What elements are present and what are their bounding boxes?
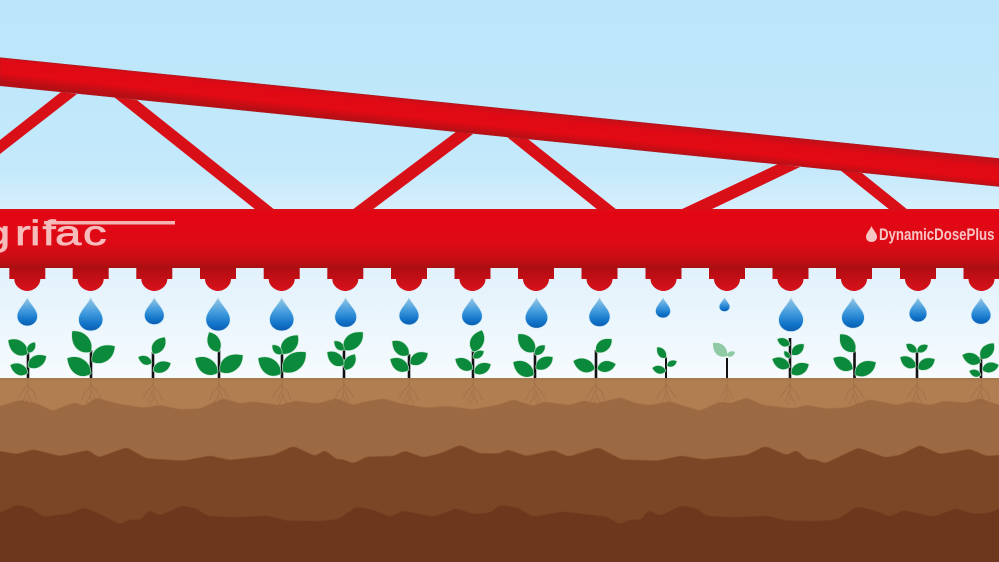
plant 7: [387, 336, 431, 378]
logo: grifac: [0, 213, 175, 253]
main boom bar: [0, 209, 999, 268]
plant roots: [18, 378, 990, 405]
plant 14: [830, 330, 880, 381]
soil layer: topsoil: [0, 378, 999, 438]
brand: DynamicDosePlus: [866, 226, 994, 244]
upper boom beam: [0, 58, 999, 186]
water drops: [17, 297, 991, 332]
plant 11: [651, 345, 678, 378]
plant 15: [897, 341, 938, 378]
soil layers: [0, 378, 999, 562]
soil surface edge: [0, 378, 999, 380]
soil layer: third: [0, 445, 999, 562]
logo line: [44, 221, 175, 224]
plant 9: [509, 329, 556, 381]
plant 10: [571, 334, 617, 378]
soil layer: second: [0, 397, 999, 562]
plant 2: [62, 326, 119, 381]
plant 1: [4, 334, 50, 378]
plant 6: [323, 326, 368, 378]
plant 4: [190, 329, 248, 380]
plant 5: [253, 330, 312, 381]
plant 3: [136, 333, 173, 378]
sky background: [0, 0, 999, 380]
plant 8: [452, 327, 493, 378]
plants row: [4, 326, 999, 381]
soil layer: deepest: [0, 505, 999, 562]
plant 16: [960, 339, 999, 379]
plant 13: [770, 335, 812, 379]
plant 12 seedling: [709, 339, 736, 378]
nozzles: [9, 267, 999, 291]
truss struts: [0, 92, 908, 210]
icon: drop: [866, 226, 877, 242]
